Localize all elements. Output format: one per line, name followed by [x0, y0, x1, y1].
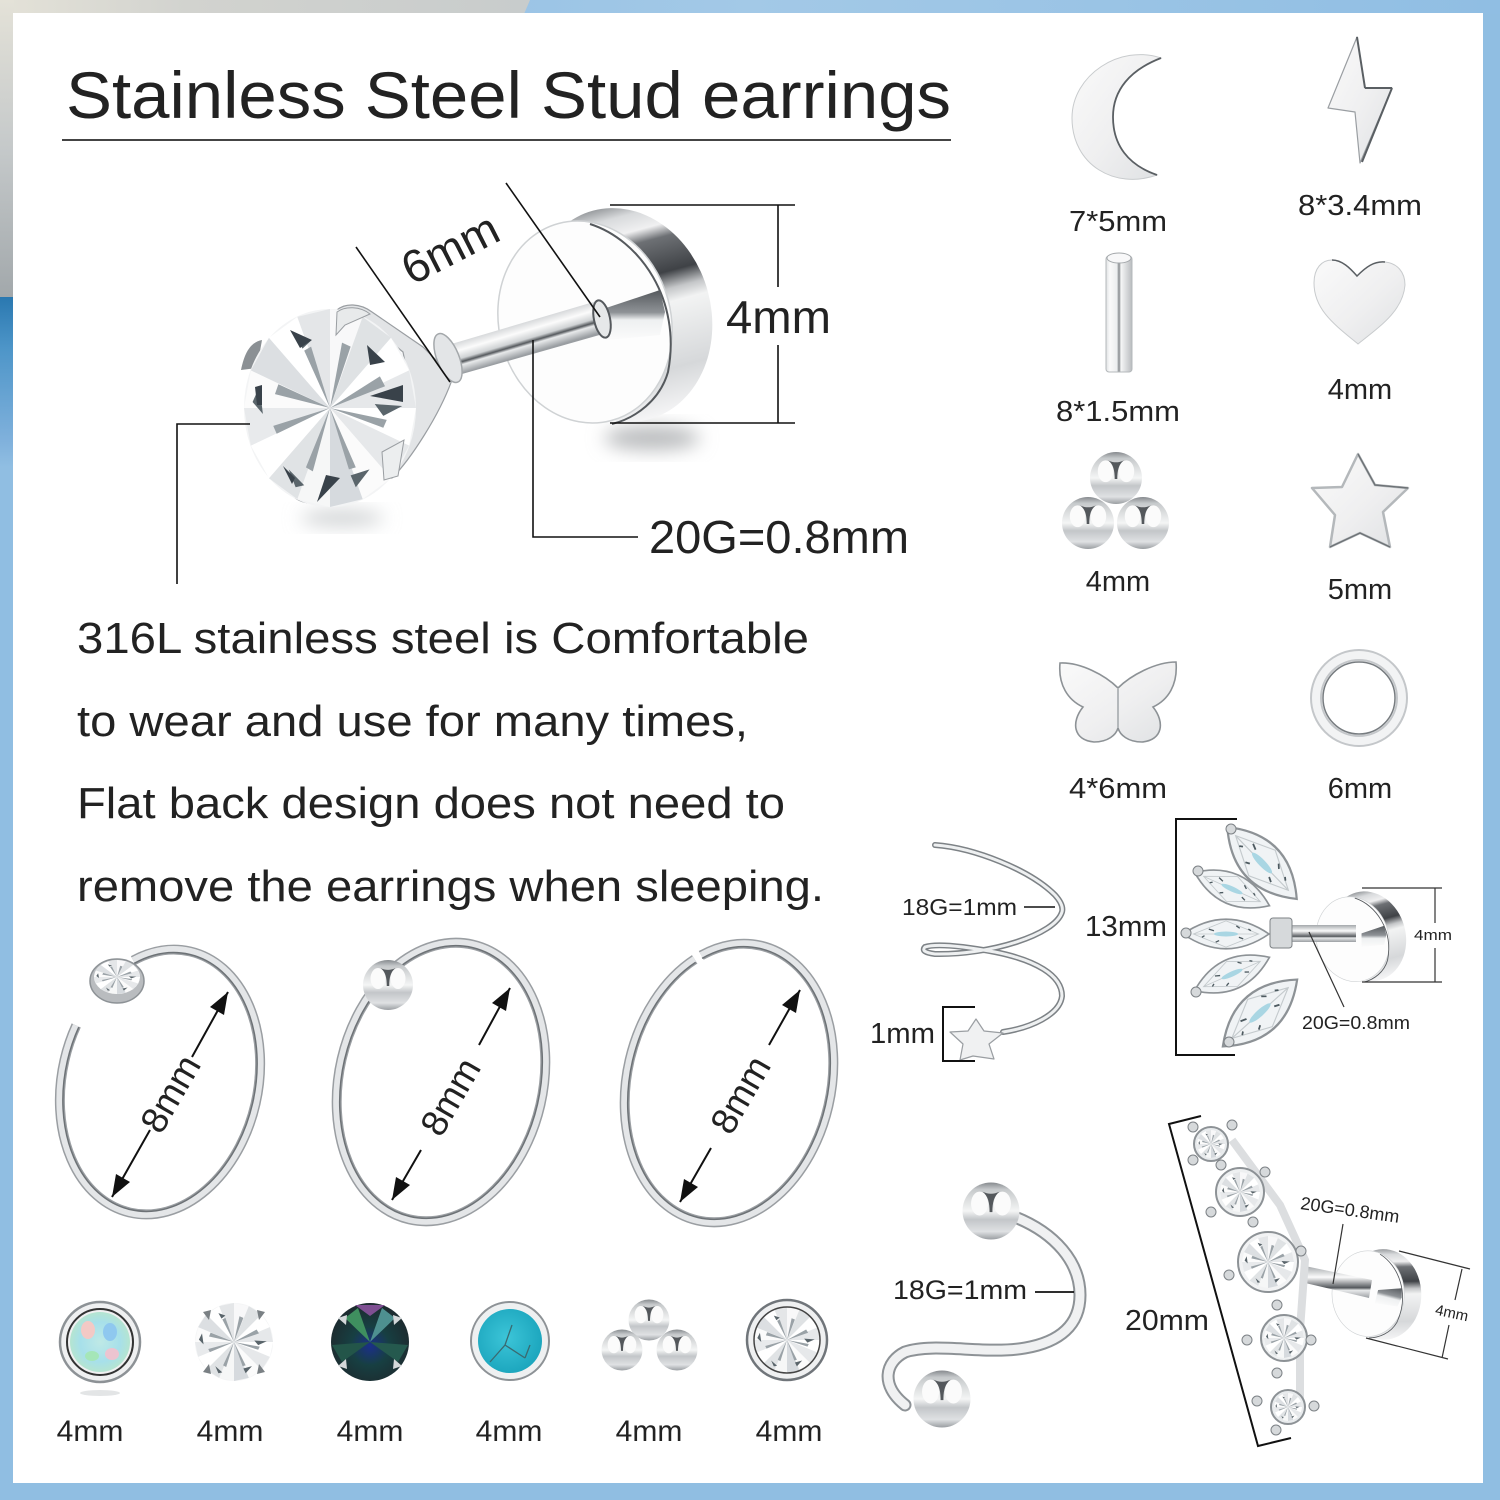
curved setting [1232, 1140, 1305, 1400]
description text [77, 614, 824, 911]
lotus marquise earring [1085, 813, 1452, 1062]
label circle: 6mm [1328, 773, 1392, 805]
stud: mystic topaz [331, 1303, 409, 1381]
label 4mm: 4mm [726, 291, 831, 343]
label moon: 7*5mm [1069, 206, 1167, 238]
main stud earring with dimensions [177, 183, 909, 584]
stud size labels [57, 1415, 822, 1448]
curved post [1301, 1266, 1372, 1298]
spiral nose ring [870, 845, 1062, 1061]
dimension lines [177, 183, 795, 584]
stud size labels: 4mm [197, 1415, 263, 1448]
stud: turquoise [471, 1302, 549, 1380]
curved label gauge: 20G=0.8mm [1299, 1193, 1401, 1227]
stud: clear crystal [195, 1303, 273, 1381]
lotus post [1292, 925, 1356, 942]
icon: star [1312, 454, 1408, 547]
description text: 316L stainless steel is Comfortable [77, 614, 809, 663]
plain hoop ring [598, 923, 860, 1243]
label three balls: 4mm [1086, 566, 1150, 598]
curved stones [1194, 1127, 1307, 1424]
earring back disc [476, 187, 736, 443]
curved label length: 20mm [1125, 1305, 1209, 1337]
icon: moon [1072, 55, 1161, 179]
stud: three balls [602, 1300, 698, 1370]
icon: circle ring [1316, 655, 1402, 741]
stud: bezel crystal [747, 1300, 827, 1380]
hoop ring with ball: 8mm [412, 1051, 489, 1143]
stud size labels: 4mm [476, 1415, 542, 1448]
label heart: 4mm [1328, 374, 1392, 406]
stud size labels: 4mm [616, 1415, 682, 1448]
icon: lightning bolt [1328, 37, 1392, 163]
description text: to wear and use for many times, [77, 697, 748, 746]
description text: remove the earrings when sleeping. [77, 862, 824, 911]
setting and prongs [241, 305, 468, 504]
curved crystal earring [1125, 1116, 1470, 1446]
lotus stones [1183, 813, 1312, 1062]
label bolt: 8*3.4mm [1298, 190, 1422, 222]
stud: opal [60, 1302, 140, 1396]
earring post [448, 301, 603, 374]
icon: bar [1106, 253, 1132, 372]
title: Stainless Steel Stud earrings [66, 58, 951, 132]
hoop ring with crystal [34, 929, 286, 1235]
hoop ring with ball [310, 922, 572, 1242]
spiral gauge label: 18G=1mm [902, 894, 1017, 920]
plain hoop ring: 8mm [702, 1049, 779, 1141]
spiral star [950, 1019, 1003, 1060]
label butterfly: 4*6mm [1069, 773, 1167, 805]
label gauge: 20G=0.8mm [649, 511, 909, 563]
description text: Flat back design does not need to [77, 779, 785, 828]
curved label back: 4mm [1434, 1302, 1470, 1325]
icon: three balls large [1062, 452, 1169, 549]
stud size labels: 4mm [57, 1415, 123, 1448]
lotus back disc [1307, 883, 1416, 990]
stud size labels: 4mm [337, 1415, 403, 1448]
spiral star label: 1mm [870, 1018, 935, 1050]
twist barbell earring [888, 1182, 1080, 1428]
icon: butterfly [1060, 662, 1176, 742]
main diamond [244, 308, 416, 507]
label bar: 8*1.5mm [1056, 396, 1180, 428]
lotus label gauge: 20G=0.8mm [1302, 1013, 1410, 1033]
hoop ring with crystal: 8mm [132, 1048, 209, 1140]
icon: heart [1314, 260, 1405, 344]
stud size labels: 4mm [756, 1415, 822, 1448]
curved back disc [1311, 1228, 1443, 1358]
label star: 5mm [1328, 574, 1392, 606]
lotus label back: 4mm [1414, 927, 1452, 944]
twist gauge label: 18G=1mm [893, 1275, 1027, 1305]
lotus label height: 13mm [1085, 911, 1167, 943]
label 6mm: 6mm [393, 202, 507, 295]
